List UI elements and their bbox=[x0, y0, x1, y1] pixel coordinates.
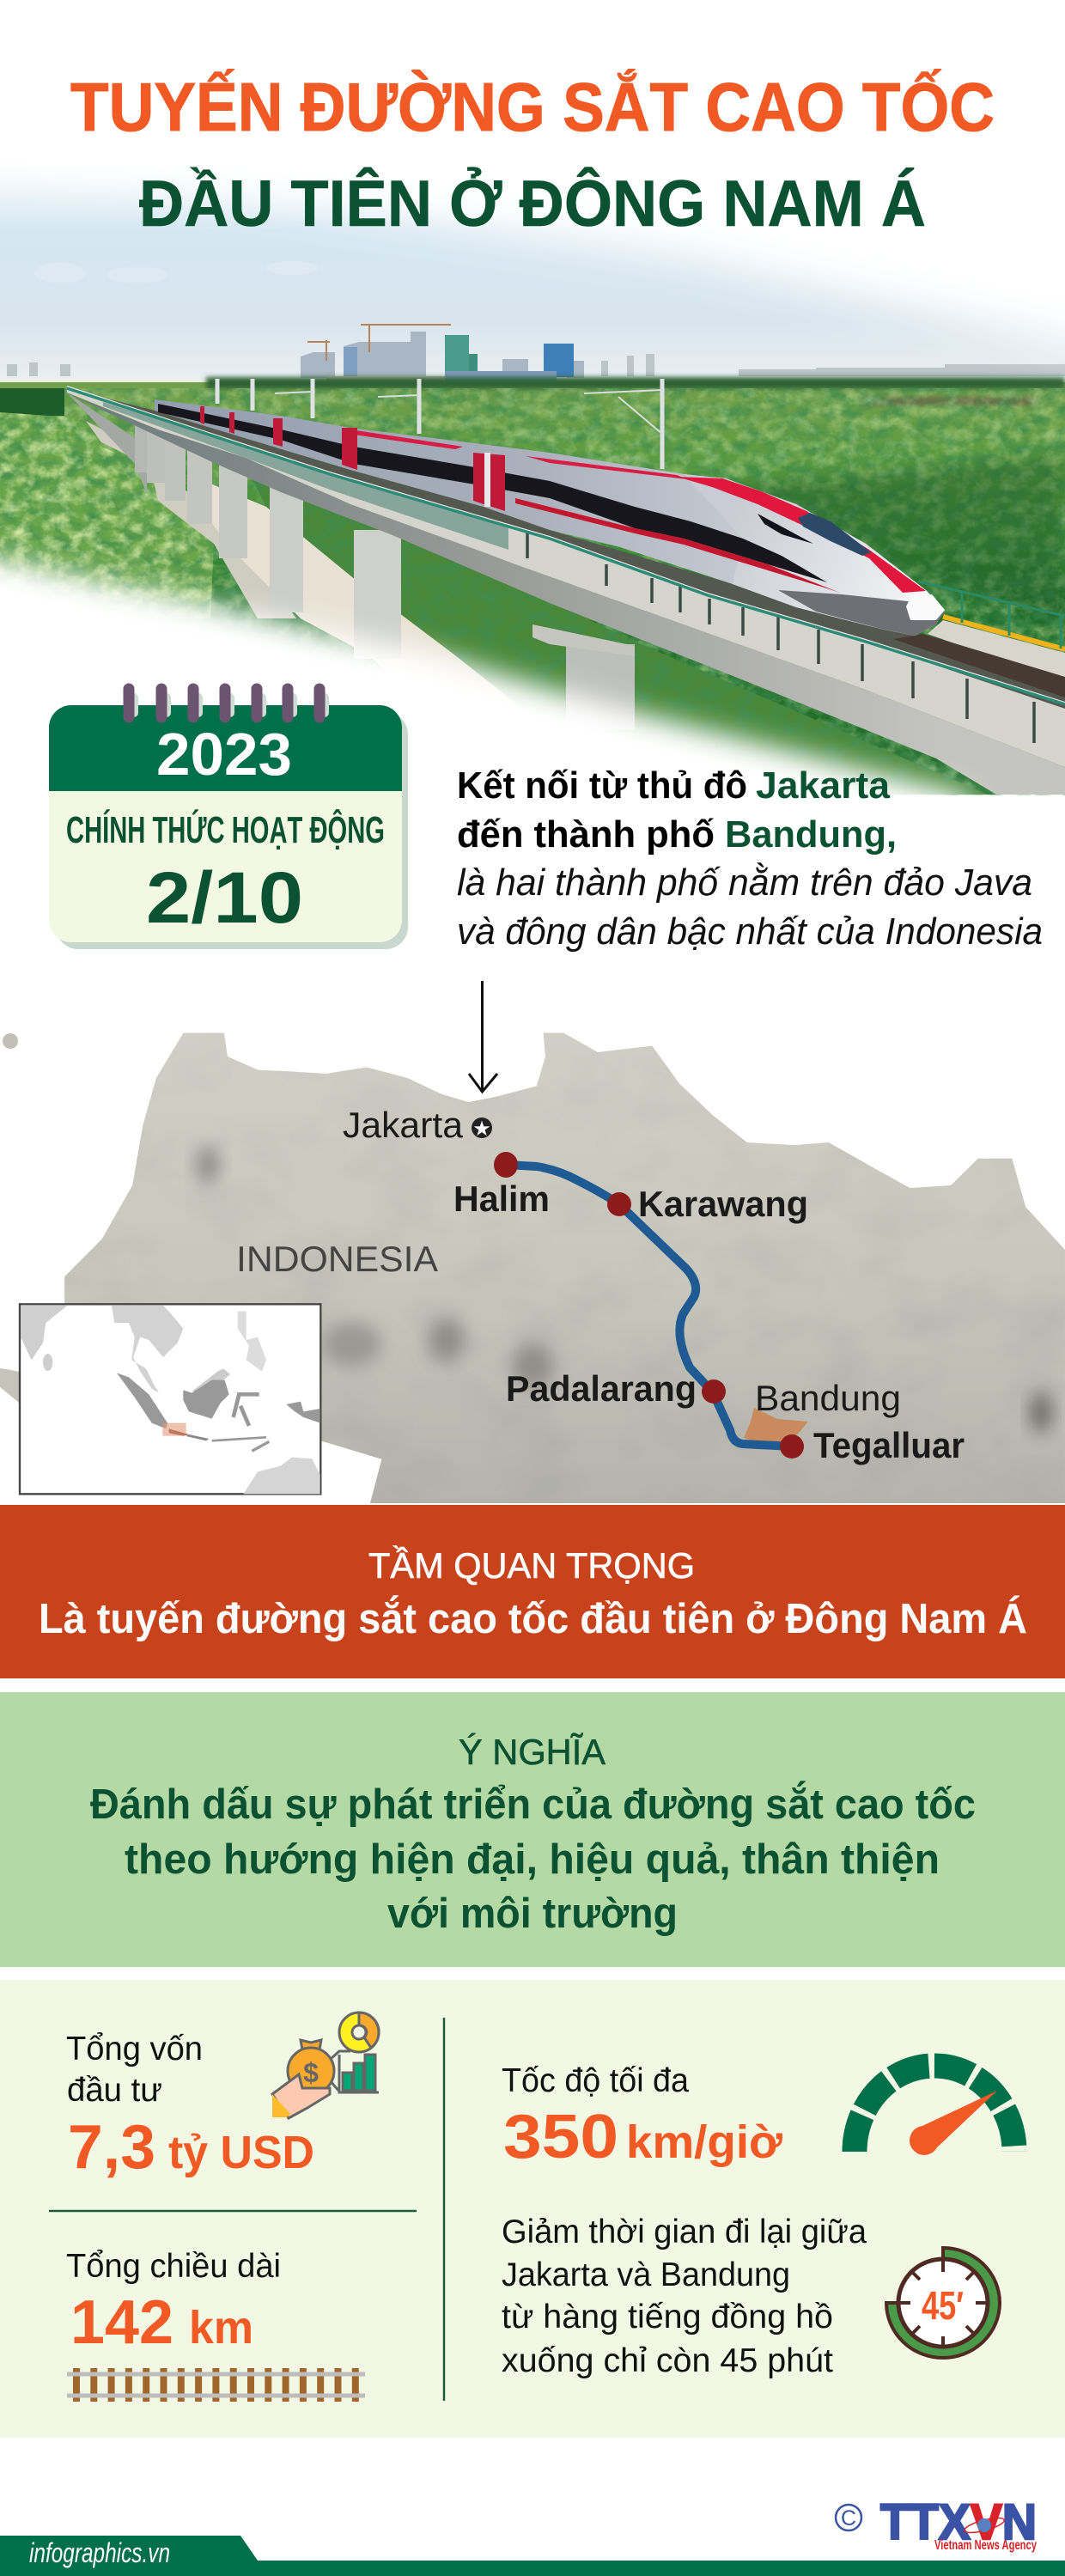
stat: travel time reduction: từ hàng tiếng đồng hồ bbox=[502, 2299, 833, 2335]
calendar: 2/10/2023 start date bbox=[49, 689, 408, 949]
footer bar bbox=[0, 2536, 1065, 2576]
rail route line bbox=[506, 1165, 791, 1446]
stat: top speed: km/giờ bbox=[626, 2116, 783, 2168]
intro text: Jakarta bbox=[756, 764, 891, 807]
Bandung city area bbox=[744, 1408, 808, 1448]
stat: top speed bbox=[502, 2062, 783, 2171]
title bbox=[70, 69, 995, 241]
title: TUYẾN ĐƯỜNG SẮT CAO TỐC bbox=[70, 69, 995, 145]
red panel: importance: TẦM QUAN TRỌNG bbox=[368, 1545, 695, 1586]
intro text: đến thành phố bbox=[457, 813, 715, 856]
map labels: Halim bbox=[453, 1178, 550, 1219]
map labels bbox=[236, 1105, 965, 1465]
intro text: Kết nối từ thủ đô bbox=[457, 764, 747, 807]
map of West Java route bbox=[0, 1031, 1065, 1505]
calendar: 2/10/2023 start date: 2/10 bbox=[146, 857, 303, 938]
green panel: significance: Ý NGHĨA bbox=[459, 1732, 606, 1772]
icon: money bag and charts: $ bbox=[303, 2057, 319, 2088]
stat: travel time reduction: Giảm thời gian đi lại giữa bbox=[502, 2214, 867, 2250]
stat: travel time reduction bbox=[502, 2214, 867, 2379]
stat: total length: Tổng chiều dài bbox=[66, 2248, 281, 2285]
green panel: significance: với môi trường bbox=[387, 1891, 678, 1937]
calendar: 2/10/2023 start date: 2023 bbox=[156, 721, 292, 788]
inset locator map bbox=[20, 1304, 320, 1494]
icon: money bag and charts bbox=[272, 2013, 379, 2118]
intro text: Bandung, bbox=[725, 813, 897, 856]
copyright and TTXVN logo: C bbox=[841, 2506, 856, 2530]
red panel: importance: Là tuyến đường sắt cao tốc đầu tiên ở Đông Nam Á bbox=[39, 1595, 1027, 1642]
intro text bbox=[457, 764, 1043, 953]
stat: total investment: tỷ USD bbox=[168, 2127, 314, 2178]
hero photo: high speed train on viaduct bbox=[0, 179, 1065, 795]
copyright and TTXVN logo: TTXVN bbox=[880, 2494, 1037, 2550]
stat: travel time reduction: Jakarta và Bandung bbox=[502, 2256, 790, 2293]
map labels: Karawang bbox=[638, 1184, 808, 1224]
icon: railway track bbox=[67, 2368, 365, 2402]
green panel: significance: Đánh dấu sự phát triển của đường sắt cao tốc bbox=[90, 1781, 976, 1828]
arrow to Jakarta bbox=[469, 981, 497, 1092]
title: ĐẦU TIÊN Ở ĐÔNG NAM Á bbox=[139, 167, 926, 241]
stat: total length bbox=[66, 2248, 281, 2357]
stat: total investment: Tổng vốn bbox=[66, 2031, 203, 2067]
map labels: Bandung bbox=[755, 1378, 901, 1418]
stat: total length: 142 bbox=[70, 2288, 173, 2357]
map labels: Padalarang bbox=[506, 1368, 697, 1409]
stat: top speed: Tốc độ tối đa bbox=[502, 2062, 689, 2099]
icon: speedometer bbox=[855, 2066, 1014, 2155]
icon: 45 minute clock bbox=[886, 2248, 1000, 2358]
stat: travel time reduction: xuống chỉ còn 45 phút bbox=[502, 2342, 833, 2379]
calendar: 2/10/2023 start date: CHÍNH THỨC HOẠT ĐỘNG bbox=[66, 807, 385, 851]
map labels: Tegalluar bbox=[813, 1425, 965, 1465]
stat: total investment bbox=[66, 2031, 314, 2182]
intro text: và đông dân bậc nhất của Indonesia bbox=[457, 910, 1043, 953]
icon: 45 minute clock: 45′ bbox=[922, 2283, 964, 2328]
stats panel bbox=[0, 1980, 1065, 2438]
green panel: significance: theo hướng hiện đại, hiệu quả, thân thiện bbox=[125, 1836, 940, 1883]
stations bbox=[494, 1152, 804, 1459]
green panel: significance bbox=[0, 1692, 1065, 1967]
stat: top speed: 350 bbox=[503, 2103, 618, 2171]
map labels: Jakarta bbox=[343, 1105, 464, 1145]
intro text: là hai thành phố nằm trên đảo Java bbox=[457, 862, 1032, 904]
red panel: importance bbox=[0, 1505, 1065, 1678]
map labels: INDONESIA bbox=[236, 1239, 438, 1279]
footer bar: infographics.vn bbox=[29, 2537, 170, 2568]
stat: total investment: 7,3 bbox=[68, 2113, 155, 2182]
stat: total investment: đầu tư bbox=[67, 2072, 162, 2109]
stat: total length: km bbox=[189, 2302, 253, 2354]
Jakarta capital marker: ★ bbox=[472, 1117, 491, 1141]
